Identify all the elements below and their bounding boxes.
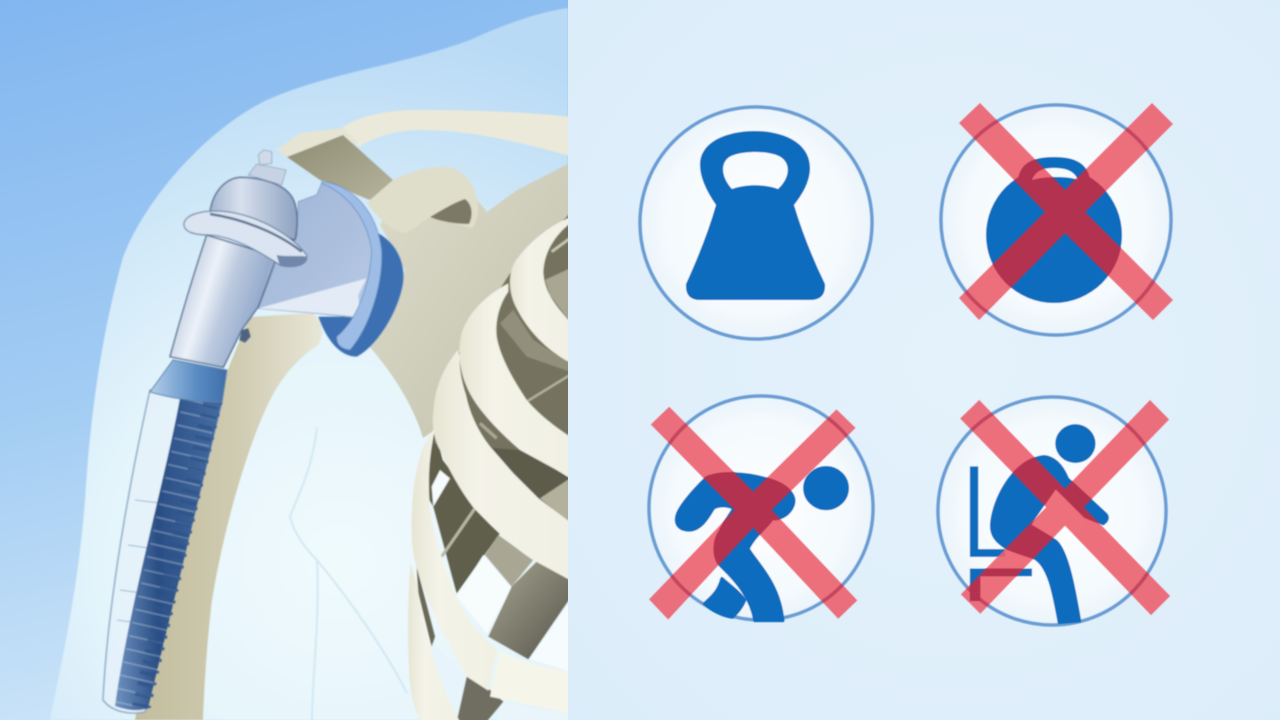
scapula	[368, 163, 570, 438]
implant: glenosphere backing	[318, 233, 404, 357]
icon: red cross on heavy kettlebell	[958, 102, 1174, 320]
implant: screw detail	[239, 328, 251, 343]
icon: red cross on seated figure	[960, 400, 1170, 616]
implant: shoulder prosthesis	[103, 150, 404, 713]
implant: transparent lower stem	[103, 390, 222, 713]
skin fold lines	[290, 427, 407, 720]
acromion	[367, 167, 478, 233]
implant: metal stem	[170, 235, 277, 367]
icon: red cross on bending figure	[648, 406, 858, 620]
skeleton: scapula, clavicle and ribs	[135, 110, 570, 720]
panel: exercise restrictions	[638, 102, 1174, 628]
implant: thin cage lines	[116, 499, 158, 623]
implant: threaded core	[115, 398, 222, 710]
implant: collar	[150, 360, 227, 402]
icon: prohibited bending and lifting	[649, 396, 873, 620]
panel: shoulder illustration	[0, 0, 570, 720]
icon: prohibited pushing up from chair	[938, 397, 1166, 625]
rib C	[433, 350, 570, 580]
implant: top collar and nut	[248, 164, 286, 185]
implant: upper assembly	[170, 150, 404, 367]
icon: prohibited heavy kettlebell	[941, 105, 1171, 335]
body silhouette	[50, 8, 568, 720]
lower rib cage background	[417, 428, 570, 720]
clavicle	[343, 110, 570, 156]
humerus	[135, 313, 322, 720]
rib B	[459, 283, 570, 477]
upper rib cage background	[433, 213, 570, 457]
icon: allowed kettlebell	[640, 107, 872, 339]
implant: baseplate rim	[322, 182, 382, 350]
implant: dome	[210, 177, 297, 240]
coracoid process	[277, 128, 358, 157]
implant: thread stripes	[131, 402, 201, 708]
implant: thread bumps	[149, 402, 221, 708]
implant: neck highlight	[258, 278, 367, 317]
rib D	[412, 428, 497, 691]
rib A	[510, 217, 570, 363]
implant: neck	[258, 183, 374, 318]
lower cream rib	[490, 650, 570, 713]
acromion shadow	[430, 199, 472, 224]
rib E	[408, 563, 460, 720]
implant: flange	[184, 211, 307, 266]
